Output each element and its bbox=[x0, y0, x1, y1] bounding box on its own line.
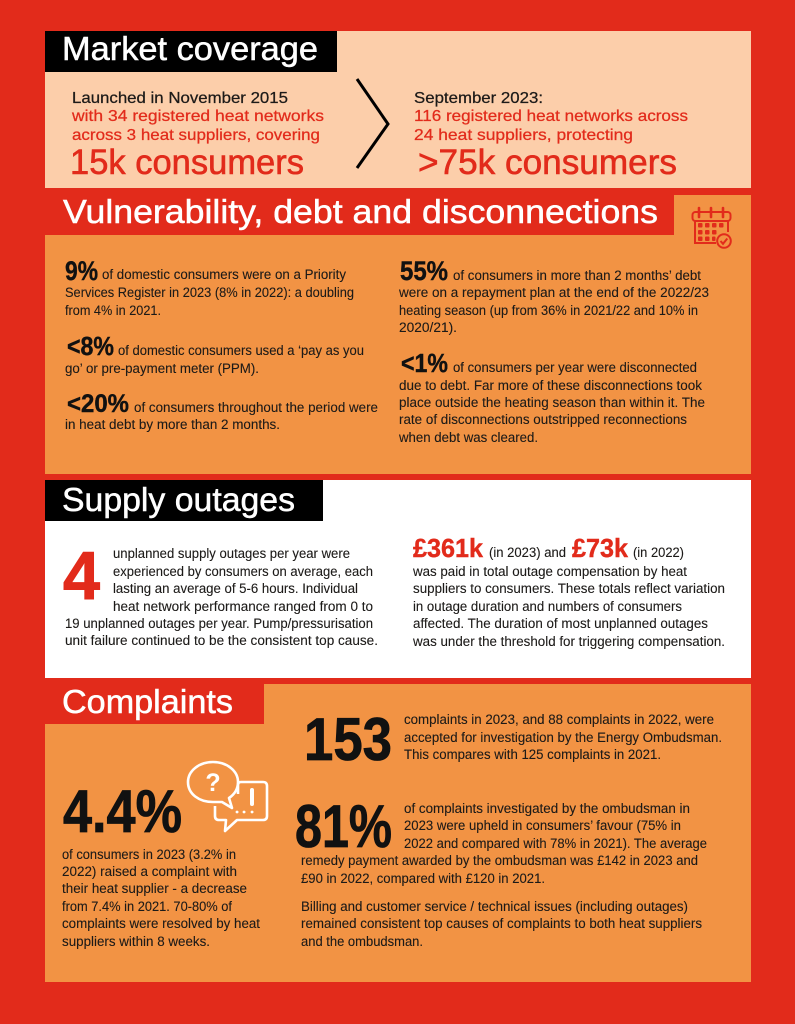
stat: 4 unplanned outages: unit failure continued to be the consistent top cause. bbox=[65, 633, 378, 648]
stat: outage compensation: in outage duration and numbers of consumers bbox=[413, 599, 682, 614]
stat: 9% priority services register: Services Register in 2023 (8% in 2022): a doubling bbox=[65, 285, 354, 300]
heading: supply outages: Supply outages bbox=[62, 481, 295, 518]
stat: under 8% pre-payment meter: go’ or pre-payment meter (PPM). bbox=[65, 361, 259, 376]
text block: top causes of complaints: and the ombudsman. bbox=[301, 934, 423, 949]
stat: 81% upheld: 2022 and compared with 78% in 2021). The average bbox=[404, 836, 707, 851]
panel: market coverage bbox=[45, 30, 751, 188]
stat: under 1% disconnected: <1% bbox=[401, 348, 448, 378]
stat: 81% upheld: £90 in 2022, compared with £120 in 2021. bbox=[301, 871, 545, 886]
icon: calendar bbox=[692, 208, 731, 248]
stat: 81% upheld: 2023 were upheld in consumers’ favour (75% in bbox=[404, 818, 681, 833]
stat: outage compensation: suppliers to consumers. These totals reflect variation bbox=[413, 581, 725, 596]
stat: outage compensation: affected. The duration of most unplanned outages bbox=[413, 616, 708, 631]
stat: 4 unplanned outages: experienced by consumers on average, each bbox=[113, 564, 373, 579]
stat: under 1% disconnected: place outside the heating season than within it. The bbox=[399, 395, 705, 410]
stat: under 8% pre-payment meter: of domestic consumers used a ‘pay as you bbox=[118, 343, 364, 358]
panel: supply outages bbox=[45, 480, 751, 678]
stat: under 1% disconnected: rate of disconnections outstripped reconnections bbox=[399, 412, 687, 427]
stat: 55% on a repayment plan: 2020/21). bbox=[399, 320, 457, 335]
stat: outage compensation: (in 2023) and bbox=[489, 545, 566, 560]
stat: 9% priority services register: 9% bbox=[65, 256, 98, 286]
stat: outage compensation bbox=[412, 533, 725, 649]
stat: 4 unplanned outages: 4 bbox=[63, 538, 100, 614]
stat: 4.4% raised a complaint: of consumers in 2023 (3.2% in bbox=[62, 847, 236, 862]
stat: 153 complaints accepted bbox=[304, 706, 722, 773]
stat: 81% upheld: remedy payment awarded by the ombudsman was £142 in 2023 and bbox=[301, 853, 698, 868]
heading: vulnerability, debt and disconnections: Vulnerability, debt and disconnections bbox=[63, 193, 658, 230]
stat: under 1% disconnected bbox=[398, 348, 705, 445]
stat: under 1% disconnected: due to debt. Far more of these disconnections took bbox=[399, 378, 702, 393]
stat: 55% on a repayment plan: heating season (up from 36% in 2021/22 and 10% in bbox=[399, 303, 698, 318]
stat: outage compensation: was paid in total outage compensation by heat bbox=[412, 564, 687, 579]
stat: under 1% disconnected: of consumers per year were disconnected bbox=[453, 360, 697, 375]
stat: 9% priority services register: from 4% in 2021. bbox=[65, 303, 161, 318]
text block: top causes of complaints bbox=[301, 899, 702, 949]
stat: outage compensation: £361k bbox=[413, 533, 484, 563]
stat: 55% on a repayment plan: were on a repayment plan at the end of the 2022/23 bbox=[398, 285, 709, 300]
stat: under 20% in heat debt: <20% bbox=[67, 390, 129, 418]
stat: 55% on a repayment plan: 55% bbox=[400, 256, 448, 286]
stat: 55% on a repayment plan: of consumers in more than 2 months’ debt bbox=[453, 268, 701, 283]
stat: under 1% disconnected: when debt was cleared. bbox=[398, 430, 538, 445]
stat: 153 complaints accepted: 153 bbox=[304, 706, 392, 773]
stat: outage compensation: (in 2022) bbox=[633, 545, 684, 560]
stat: 4 unplanned outages: lasting an average of 5-6 hours. Individual bbox=[113, 581, 358, 596]
stat: 4.4% raised a complaint: their heat supplier - a decrease bbox=[62, 881, 247, 896]
stat: under 20% in heat debt: of consumers throughout the period were bbox=[134, 400, 378, 415]
panel: complaints bbox=[45, 683, 751, 982]
heading: market coverage: Market coverage bbox=[62, 30, 318, 67]
stat: outage compensation: was under the threshold for triggering compensation. bbox=[412, 634, 725, 649]
icon: speech bubbles: ? bbox=[205, 769, 221, 797]
stat: 81% upheld: 81% bbox=[295, 793, 392, 860]
stat: 153 complaints accepted: accepted for investigation by the Energy Ombudsman. bbox=[404, 730, 722, 745]
stat: under 8% pre-payment meter bbox=[65, 331, 364, 376]
stat: under 20% in heat debt bbox=[65, 390, 378, 432]
text block: launched in November 2015 bbox=[70, 90, 324, 182]
text block: launched in November 2015: with 34 registered heat networks bbox=[71, 108, 324, 125]
stat: 4 unplanned outages: unplanned supply outages per year were bbox=[113, 546, 350, 561]
text block: top causes of complaints: Billing and customer service / technical issues (including outages) bbox=[301, 899, 688, 914]
stat: 81% upheld bbox=[295, 793, 707, 886]
stat: 153 complaints accepted: This compares with 125 complaints in 2021. bbox=[404, 747, 661, 762]
text block: September 2023 bbox=[414, 90, 688, 182]
text block: launched in November 2015: across 3 heat suppliers, covering bbox=[72, 127, 320, 144]
panel: vulnerability, debt and disconnections bbox=[45, 193, 751, 474]
stat: under 20% in heat debt: in heat debt by more than 2 months. bbox=[65, 417, 280, 432]
stat: outage compensation: £73k bbox=[572, 533, 629, 563]
stat: 4 unplanned outages: heat network performance ranged from 0 to bbox=[113, 599, 373, 614]
text block: September 2023: >75k consumers bbox=[418, 143, 677, 182]
text block: launched in November 2015: Launched in November 2015 bbox=[72, 90, 288, 107]
arrow: chevron bbox=[357, 79, 388, 168]
stat: 9% priority services register: of domestic consumers were on a Priority bbox=[102, 267, 346, 282]
stat: 4.4% raised a complaint: from 7.4% in 2021. 70-80% of bbox=[62, 899, 232, 914]
text block: launched in November 2015: 15k consumers bbox=[70, 143, 304, 182]
stat: 4.4% raised a complaint: suppliers within 8 weeks. bbox=[62, 934, 210, 949]
stat: 4 unplanned outages bbox=[63, 538, 378, 648]
stat: 4.4% raised a complaint: 4.4% bbox=[63, 778, 182, 845]
stat: 81% upheld: of complaints investigated by the ombudsman in bbox=[404, 801, 690, 816]
stat: 4.4% raised a complaint: complaints were resolved by heat bbox=[62, 916, 260, 931]
stat: under 8% pre-payment meter: <8% bbox=[67, 331, 114, 361]
stat: 4 unplanned outages: 19 unplanned outages per year. Pump/pressurisation bbox=[65, 616, 373, 631]
stat: 153 complaints accepted: complaints in 2023, and 88 complaints in 2022, were bbox=[404, 712, 714, 727]
heading: complaints: Complaints bbox=[62, 683, 233, 720]
stat: 55% on a repayment plan bbox=[398, 256, 709, 335]
stat: 4.4% raised a complaint: 2022) raised a complaint with bbox=[62, 864, 237, 879]
heading: complaints bbox=[45, 683, 264, 724]
text block: September 2023: September 2023: bbox=[414, 90, 543, 107]
stat: 4.4% raised a complaint bbox=[62, 778, 260, 949]
icon: speech bubbles bbox=[188, 762, 267, 831]
text block: top causes of complaints: remained consistent top causes of complaints to both heat suppliers bbox=[301, 916, 702, 931]
text block: September 2023: 24 heat suppliers, protecting bbox=[414, 127, 633, 144]
stat: 9% priority services register bbox=[65, 256, 354, 318]
text block: September 2023: 116 registered heat networks across bbox=[414, 108, 688, 125]
